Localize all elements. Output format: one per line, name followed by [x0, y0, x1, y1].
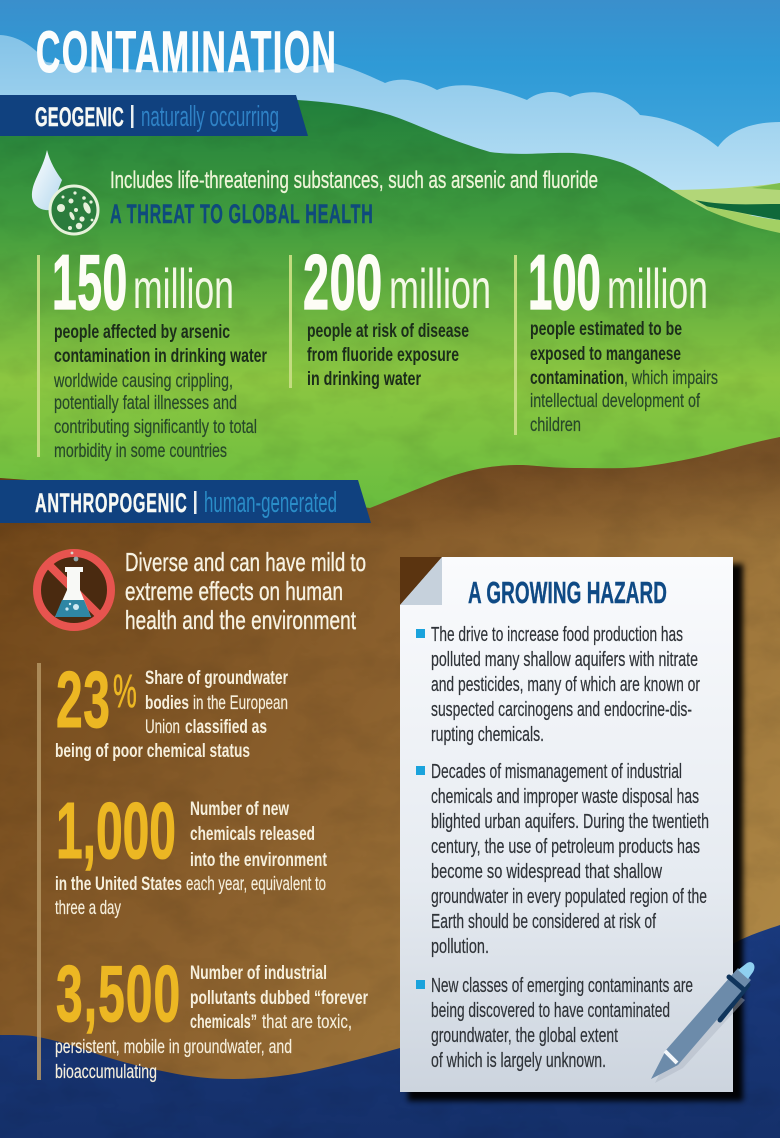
stat: 100 million: people estimated to be	[530, 318, 682, 340]
stat: 1,000 chemicals: three a day	[55, 897, 121, 919]
banner: geogenic: GEOGENIC	[35, 102, 124, 132]
icon: water drop with microbes	[32, 150, 98, 234]
bullet: food production	[416, 624, 700, 746]
banner: anthropogenic: human-generated	[204, 487, 337, 519]
stat: 3,500 pollutants: pollutants dubbed “forever	[190, 987, 368, 1009]
bullet: industrial mismanagement: become so widespread that shallow	[431, 861, 662, 883]
stat: 1,000 chemicals: in the United States	[55, 873, 182, 895]
deep groundwater	[0, 925, 780, 1138]
stat: 150 million: contributing significantly to total	[54, 416, 257, 438]
stat: 23 percent: being of poor chemical status	[55, 740, 250, 762]
stat: 23 percent: %	[113, 665, 137, 718]
stat: 200 million: people at risk of disease	[307, 320, 469, 342]
stat: 23 percent: Union	[145, 716, 180, 738]
stat: 3,500 pollutants: bioaccumulating	[55, 1061, 157, 1083]
card heading: A GROWING HAZARD	[468, 576, 667, 610]
folded corner	[400, 557, 442, 605]
banner: anthropogenic: ANTHROPOGENIC	[35, 488, 187, 518]
bullet: emerging contaminants: being discovered to have contaminated	[431, 1000, 670, 1022]
brown soil	[0, 437, 780, 1138]
stat: 1,000 chemicals	[55, 785, 327, 919]
bullet: industrial mismanagement: Earth should be considered at risk of	[431, 911, 656, 933]
card sheet	[400, 557, 733, 1092]
stat: 23 percent: bodies	[145, 692, 189, 714]
stat: 100 million: intellectual development of	[530, 390, 700, 412]
stat: 150 million: morbidity in some countries	[54, 440, 227, 462]
banner: geogenic	[0, 95, 308, 136]
stat: 150 million: 150	[52, 240, 127, 326]
stat: 100 million: million	[607, 257, 708, 320]
stats rule	[37, 663, 41, 1080]
stat: 100 million: 100	[528, 240, 601, 326]
stat: 3,500 pollutants: chemicals”	[190, 1011, 257, 1033]
stat: 1,000 chemicals: each year, equivalent to	[186, 873, 326, 895]
stat: 200 million: in drinking water	[307, 368, 421, 390]
subheading: threat: A THREAT TO GLOBAL HEALTH	[110, 199, 373, 229]
icon: pen	[651, 962, 754, 1083]
stat: 1,000 chemicals: Number of new	[190, 798, 290, 820]
bullet: food production: rupting chemicals.	[431, 724, 544, 746]
intro text: anthropogenic: Diverse and can have mild to	[125, 547, 366, 577]
stat: 23 percent: in the European	[193, 692, 288, 714]
stat: 3,500 pollutants: 3,500	[56, 948, 180, 1038]
stat: 100 million: exposed to manganese	[530, 343, 681, 365]
stat: 1,000 chemicals: 1,000	[56, 785, 176, 875]
stat: 3,500 pollutants	[55, 948, 368, 1083]
title: CONTAMINATION	[36, 21, 336, 85]
bullet: emerging contaminants: of which is largely unknown.	[431, 1050, 606, 1072]
banner: anthropogenic	[0, 480, 371, 523]
stat: 100 million: children	[530, 414, 581, 436]
stat: 150 million	[37, 240, 267, 462]
icon: prohibited chemical flask	[37, 552, 111, 627]
stat: 23 percent: 23	[56, 654, 110, 744]
stat: 150 million: worldwide causing crippling,	[53, 370, 233, 392]
stat: 150 million: potentially fatal illnesses and	[54, 392, 237, 414]
intro text: anthropogenic: extreme effects on human	[125, 576, 343, 606]
stat: 1,000 chemicals: into the environment	[190, 849, 327, 871]
stat: 23 percent	[55, 654, 288, 762]
bullet: emerging contaminants: groundwater, the global extent	[431, 1025, 618, 1047]
bullet: industrial mismanagement	[416, 761, 709, 958]
distant hills	[660, 183, 780, 236]
bullet: industrial mismanagement: pollution.	[431, 936, 489, 958]
stat: 100 million	[514, 240, 718, 436]
stat: 200 million: from fluoride exposure	[307, 344, 459, 366]
stat: 100 million: contamination	[530, 367, 624, 389]
card shadow	[408, 564, 743, 1101]
panel: a growing hazard	[400, 557, 743, 1101]
stat: 200 million	[289, 239, 491, 390]
stat: 3,500 pollutants: Number of industrial	[190, 962, 327, 984]
stat: 200 million: million	[389, 257, 491, 320]
stat: 150 million: contamination in drinking water	[54, 345, 267, 367]
banner: geogenic: naturally occurring	[141, 101, 279, 133]
stat: 1,000 chemicals: chemicals released	[190, 823, 315, 845]
stat: 3,500 pollutants: persistent, mobile in groundwater, and	[55, 1036, 292, 1058]
intro text: anthropogenic: health and the environment	[125, 605, 357, 635]
stat: 200 million: 200	[303, 239, 382, 326]
green hill	[0, 100, 780, 520]
intro text: anthropogenic	[125, 547, 366, 635]
stat: 23 percent: classified as	[185, 716, 267, 738]
soil shading	[0, 437, 780, 560]
stat: 3,500 pollutants: that are toxic,	[262, 1011, 352, 1033]
stat: 150 million: million	[133, 257, 234, 320]
stat: 100 million: , which impairs	[624, 367, 718, 389]
clouds	[0, 35, 780, 260]
stat: 150 million: people affected by arsenic	[54, 321, 230, 343]
stat: 23 percent: Share of groundwater	[145, 667, 288, 689]
sky	[0, 0, 780, 260]
bullet: emerging contaminants	[416, 975, 693, 1072]
